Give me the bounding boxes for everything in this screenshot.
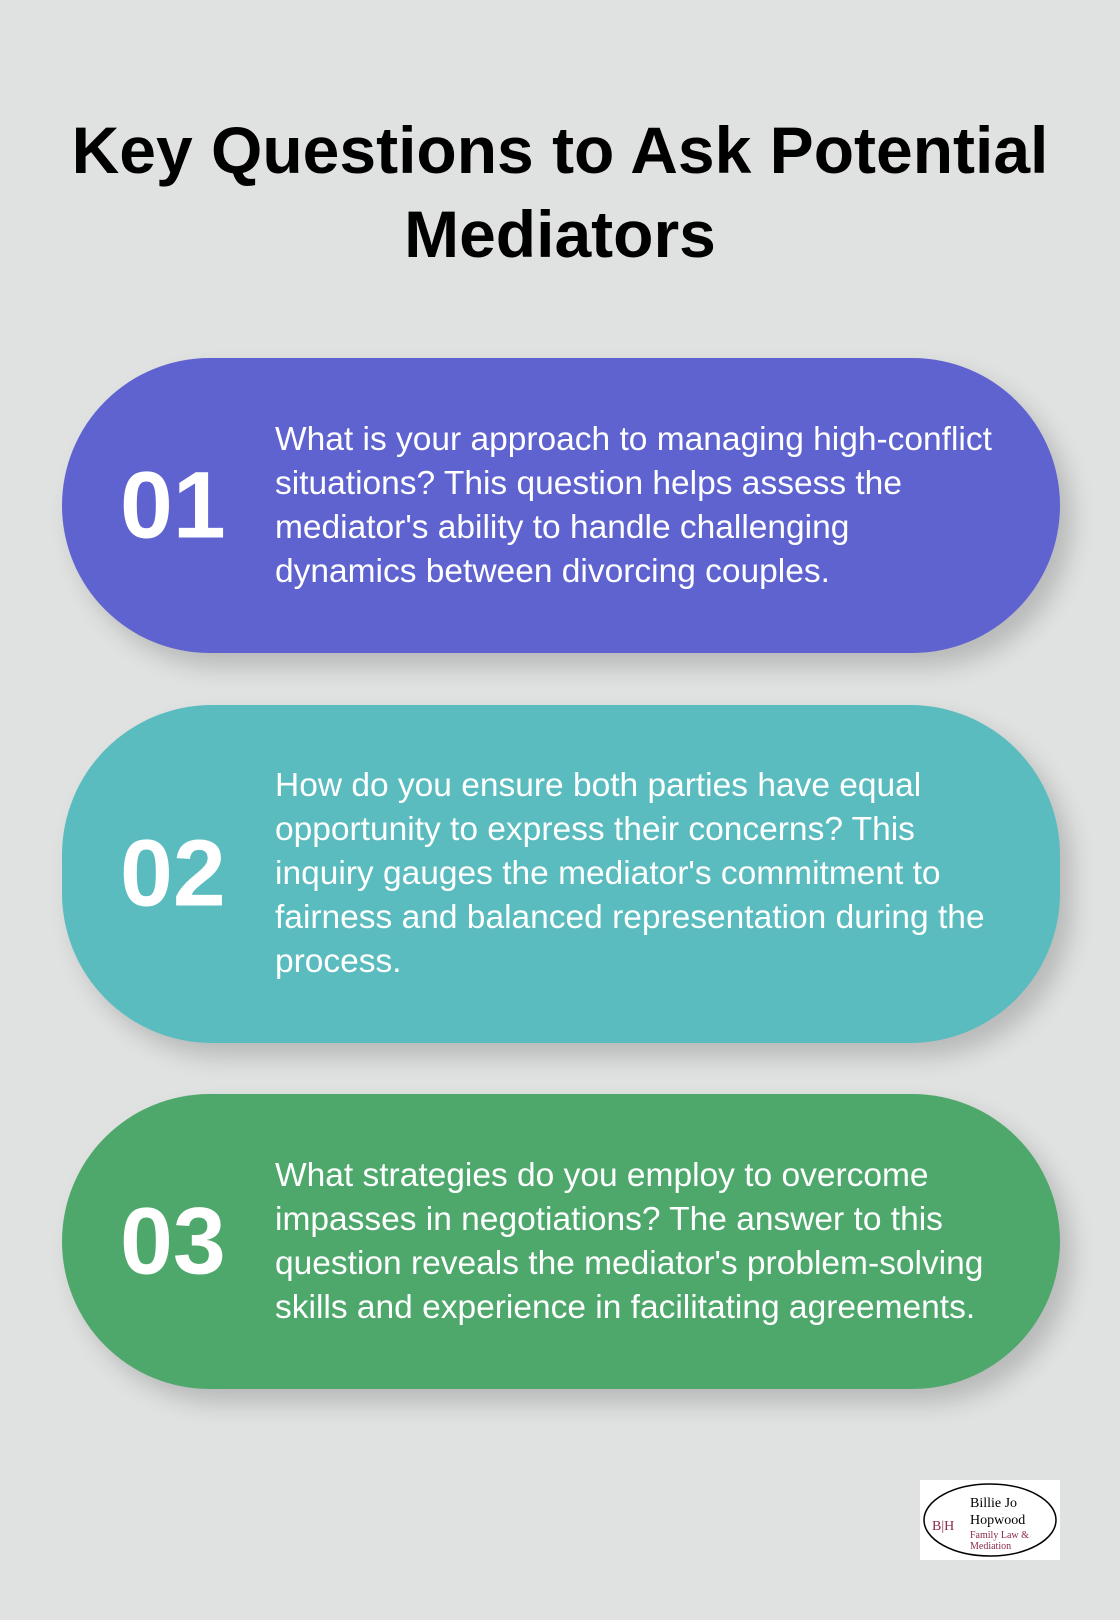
text 2: inquiry gauges the mediator's commitment to <box>275 855 941 892</box>
panel: question 3 <box>62 1094 1060 1389</box>
logo: Family Law & <box>970 1530 1029 1541</box>
panel: question 2 <box>62 705 1060 1043</box>
panel: question 1 <box>62 358 1060 653</box>
text 2: How do you ensure both parties have equal <box>275 767 921 804</box>
title <box>72 113 1048 271</box>
text 3: skills and experience in facilitating agreements. <box>275 1288 975 1326</box>
text 1: mediator's ability to handle challenging <box>275 508 849 546</box>
logo <box>920 1480 1060 1560</box>
text 2: fairness and balanced representation during the <box>275 899 985 936</box>
text 1: situations? This question helps assess the <box>275 464 902 502</box>
text 1: dynamics between divorcing couples. <box>275 552 830 590</box>
text 2: process. <box>275 943 402 980</box>
text 3: What strategies do you employ to overcome <box>275 1156 929 1194</box>
text 3: impasses in negotiations? The answer to this <box>275 1200 943 1238</box>
text 2 <box>275 767 985 980</box>
logo: Billie Jo <box>970 1496 1017 1511</box>
title: Mediators <box>404 197 716 271</box>
text 2: opportunity to express their concerns? This <box>275 811 915 848</box>
text 3: question reveals the mediator's problem-solving <box>275 1244 983 1282</box>
number 03: 03 <box>120 1188 226 1294</box>
text 1 <box>275 420 992 590</box>
text 3 <box>275 1156 983 1326</box>
number 02: 02 <box>120 820 226 926</box>
logo: Hopwood <box>970 1513 1025 1528</box>
text 1: What is your approach to managing high-conflict <box>275 420 992 458</box>
logo: Mediation <box>970 1541 1011 1552</box>
logo: B|H <box>932 1519 954 1534</box>
number 01: 01 <box>120 452 226 558</box>
title: Key Questions to Ask Potential <box>72 113 1048 187</box>
